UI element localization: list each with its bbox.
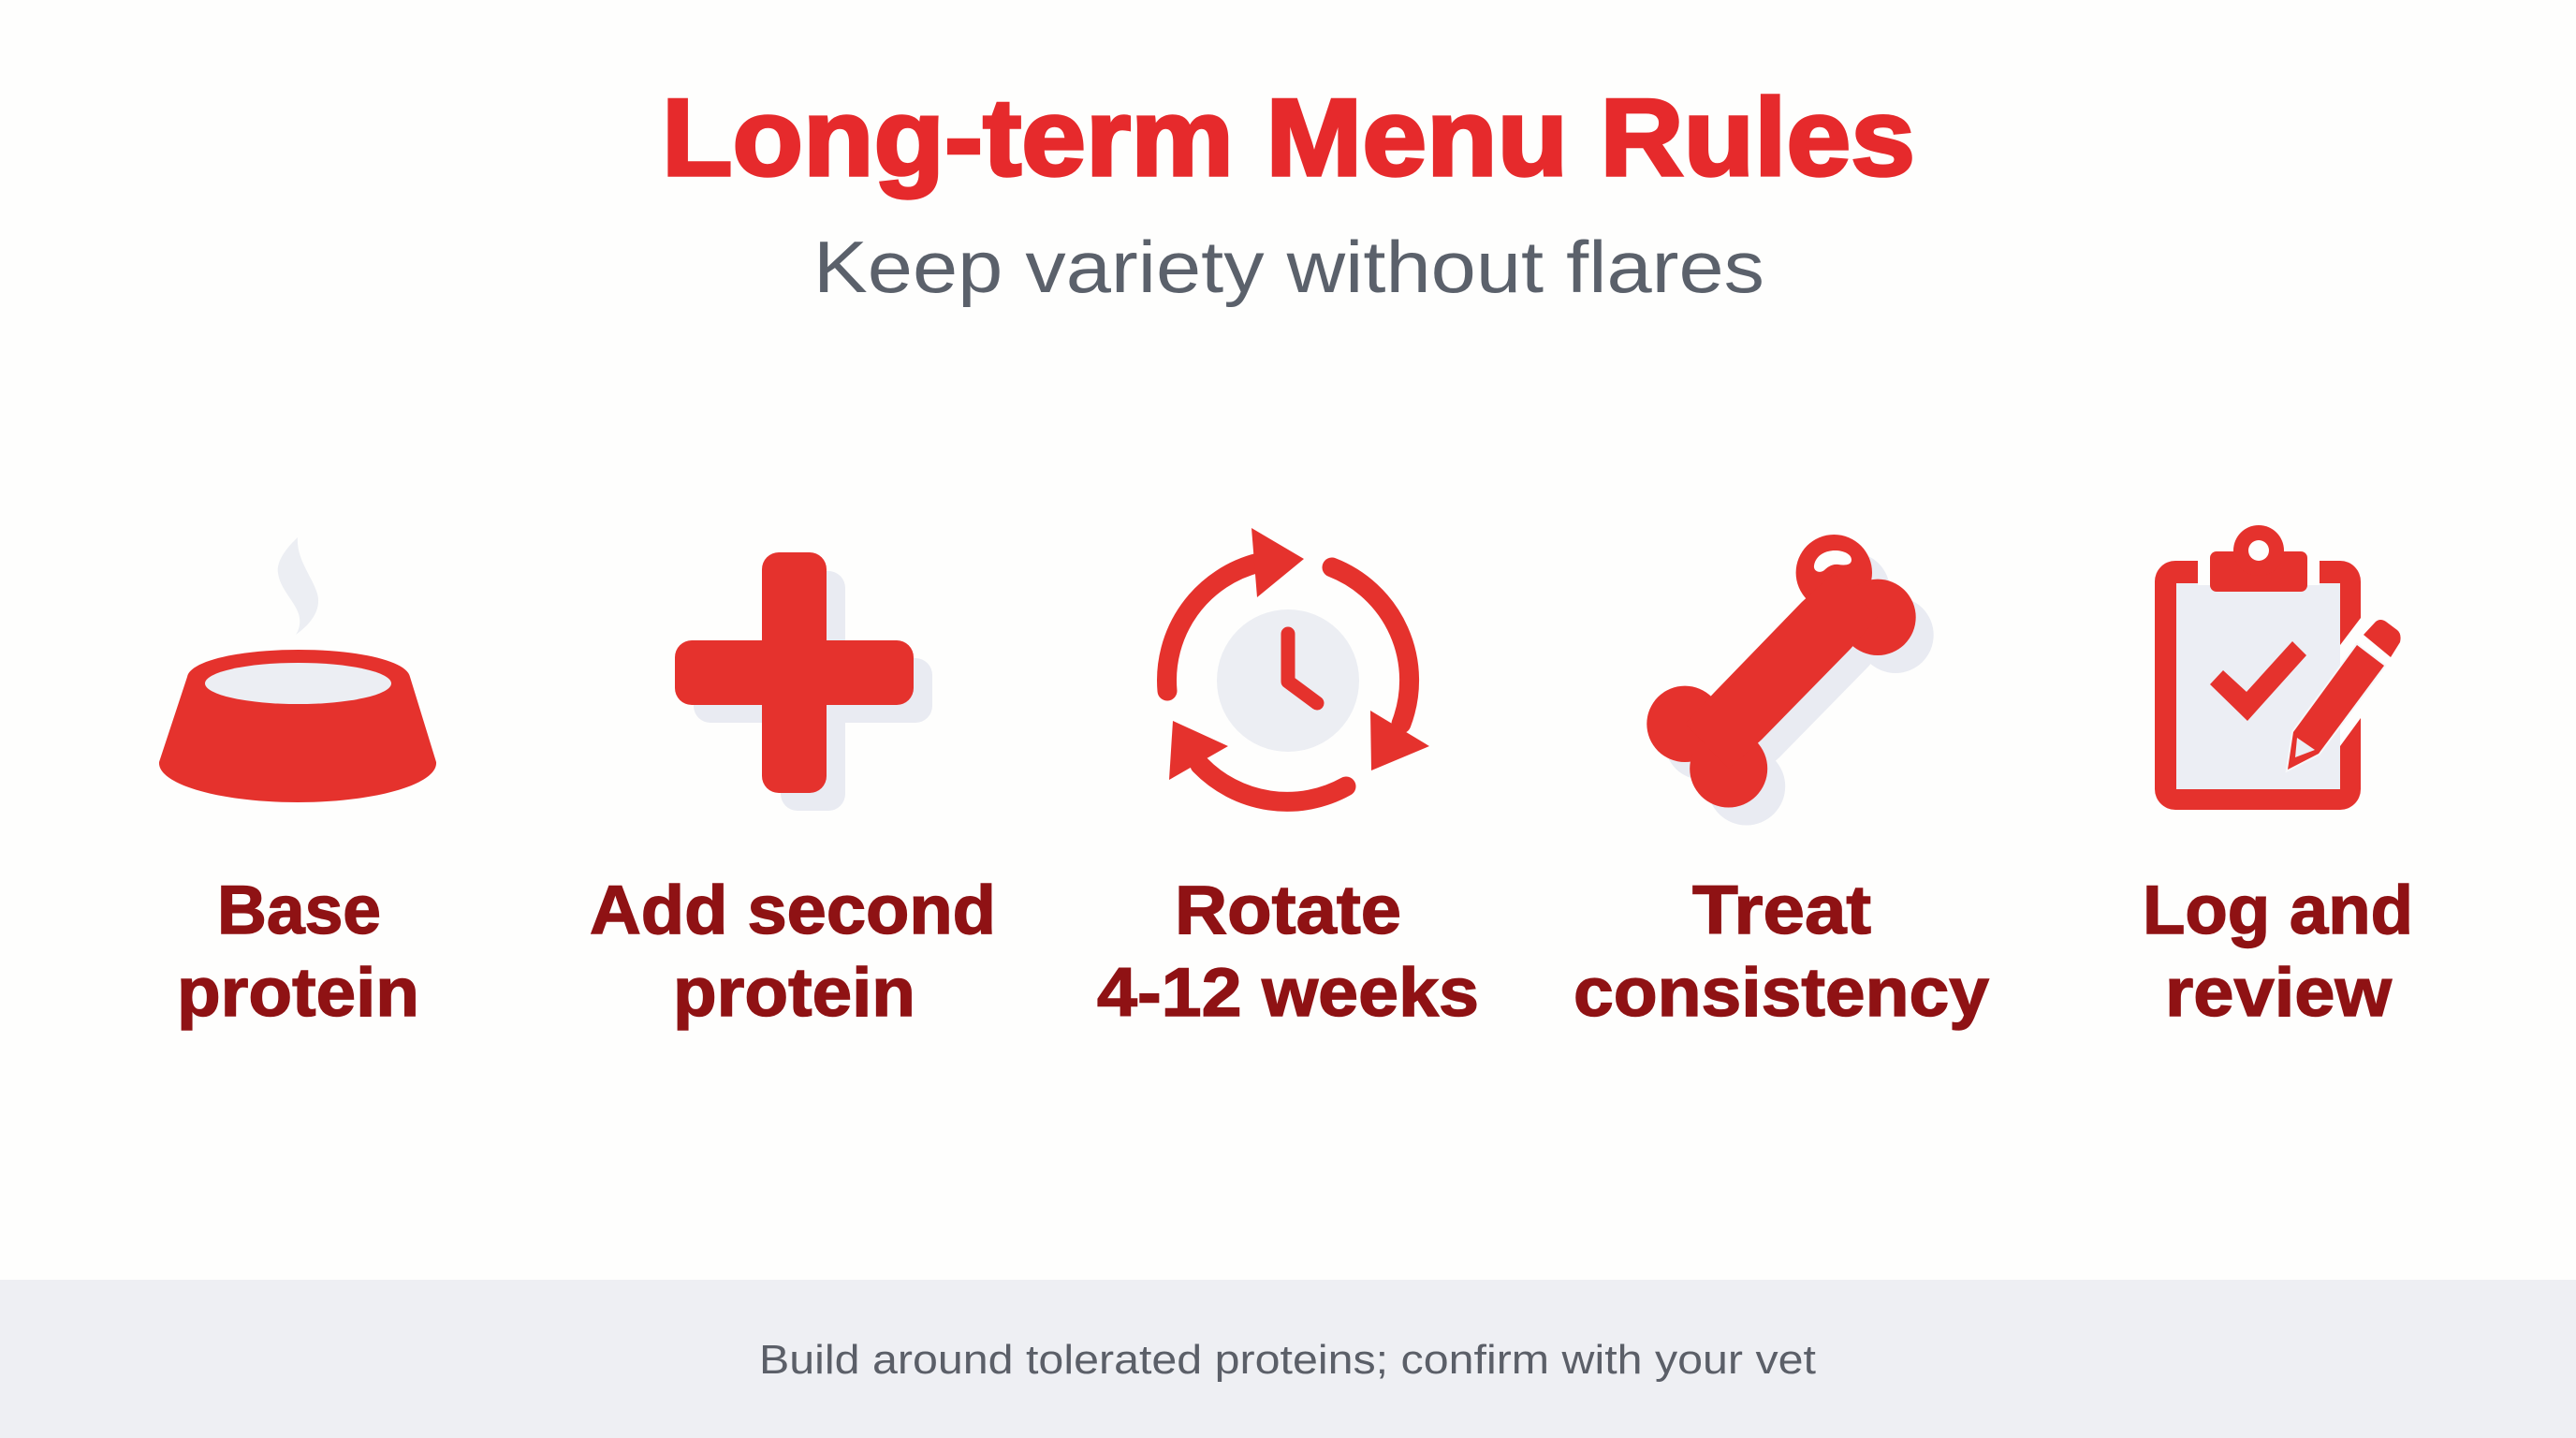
column: add second protein: [590, 552, 996, 1031]
label: treat consistency: [1573, 873, 1989, 1031]
footer note: Build around tolerated proteins; confirm with your vet: [759, 1337, 1816, 1383]
label: log and review: Log and: [2143, 873, 2413, 948]
label: base protein: Base: [217, 873, 381, 948]
footer band: [0, 1280, 2576, 1438]
icon: bone: [1647, 535, 1934, 826]
column: rotate 4-12 weeks: [1097, 528, 1479, 1031]
label: base protein: [177, 873, 419, 1031]
column: log and review: [2143, 525, 2413, 1031]
column: base protein: [159, 537, 436, 1031]
label: base protein: protein: [177, 955, 419, 1031]
subtitle: Keep variety without flares: [813, 226, 1764, 308]
icon: rotation arrows around clock: [1167, 528, 1429, 801]
icon: steaming bowl: [159, 537, 436, 802]
icon: clipboard with pencil: [2155, 525, 2401, 810]
label: treat consistency: consistency: [1573, 955, 1989, 1031]
label: rotate 4-12 weeks: [1097, 873, 1479, 1031]
label: log and review: review: [2165, 955, 2392, 1031]
title: Long-term Menu Rules: [662, 76, 1915, 198]
label: log and review: [2143, 873, 2413, 1031]
label: rotate 4-12 weeks: 4-12 weeks: [1097, 955, 1479, 1031]
label: treat consistency: Treat: [1692, 873, 1871, 948]
label: add second protein: protein: [673, 955, 915, 1031]
label: rotate 4-12 weeks: Rotate: [1175, 873, 1401, 948]
label: add second protein: [590, 873, 996, 1031]
column: treat consistency: [1573, 535, 1989, 1031]
icon: plus: [675, 552, 932, 811]
label: add second protein: Add second: [590, 873, 996, 948]
